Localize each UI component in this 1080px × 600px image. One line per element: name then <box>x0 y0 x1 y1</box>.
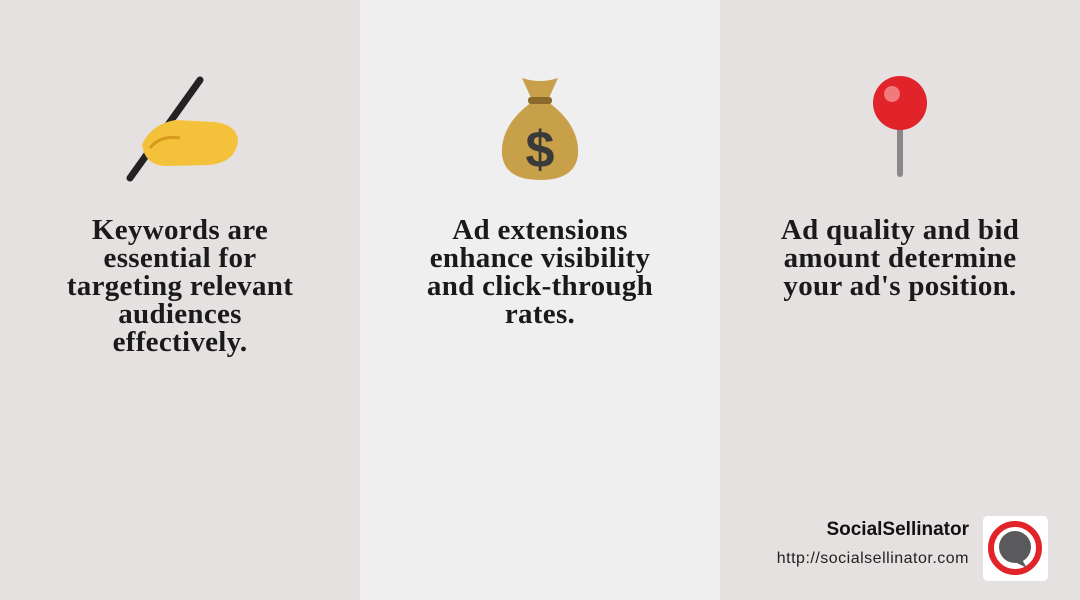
icon: money bag: $ <box>526 121 555 179</box>
logo <box>983 516 1048 581</box>
text: ad extensions: Ad extensions <box>452 214 628 246</box>
panel: ad quality <box>720 0 1080 600</box>
text: keywords: audiences <box>118 298 242 330</box>
text: keywords: effectively. <box>113 326 247 358</box>
text: ad quality: Ad quality and bid <box>781 214 1019 246</box>
panel: ad extensions <box>360 0 720 600</box>
panel: keywords <box>0 0 360 600</box>
text: keywords: targeting relevant <box>67 270 293 302</box>
text: ad quality: your ad's position. <box>783 270 1017 302</box>
text: keywords <box>67 214 293 358</box>
icon: writing hand <box>126 76 238 182</box>
text: ad extensions <box>427 214 653 330</box>
text: ad extensions: and click-through <box>427 270 653 302</box>
text: keywords: Keywords are <box>92 214 268 246</box>
text: ad quality <box>781 214 1019 302</box>
text: ad quality: amount determine <box>784 242 1016 274</box>
icon: pushpin <box>873 76 927 177</box>
text: ad extensions: enhance visibility <box>430 242 650 274</box>
text: keywords: essential for <box>104 242 256 274</box>
brand block <box>777 516 1048 581</box>
icon: money bag <box>502 78 578 180</box>
brand url: http://socialsellinator.com <box>777 550 969 567</box>
text: ad extensions: rates. <box>505 298 575 330</box>
brand name: SocialSellinator <box>826 519 969 540</box>
